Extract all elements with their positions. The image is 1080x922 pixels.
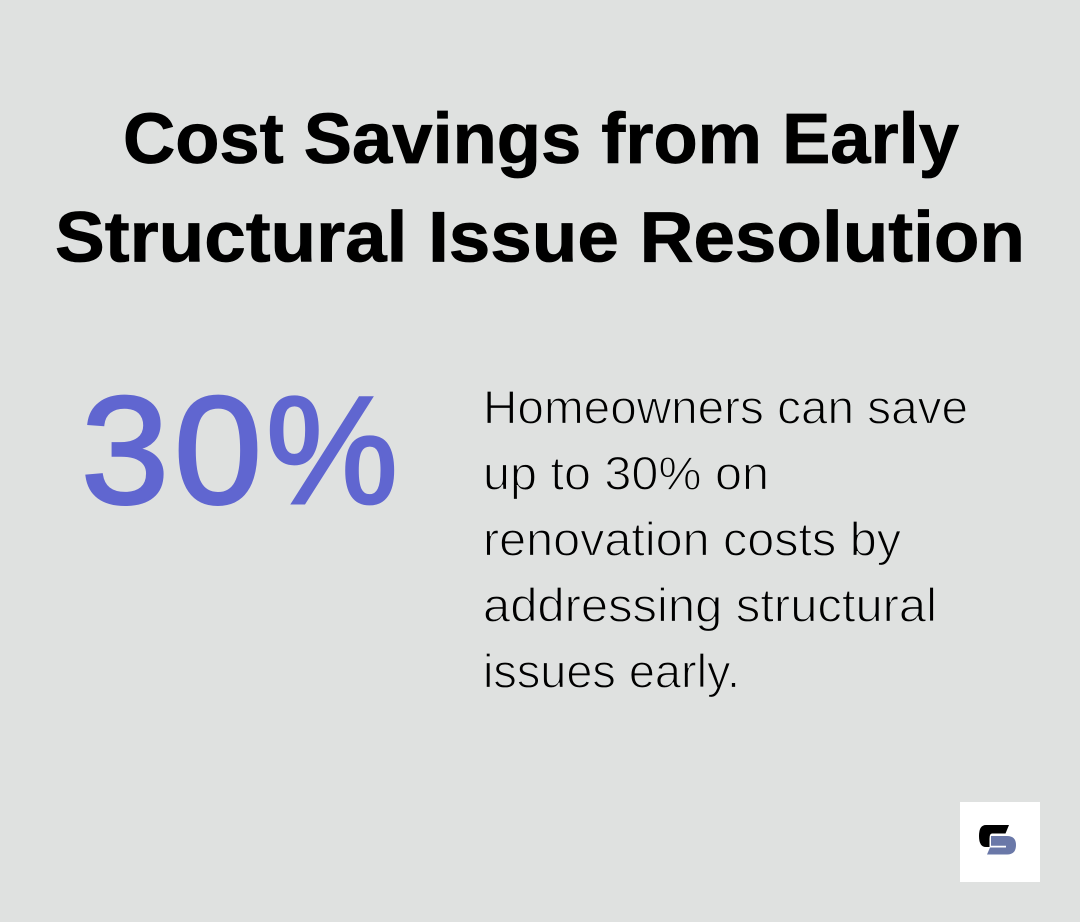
- description text: Homeowners can save: [483, 382, 968, 434]
- description text: addressing structural: [483, 580, 937, 632]
- big statistic: 30%: 0: [174, 365, 262, 536]
- title: Cost Savings from Early: [123, 99, 959, 179]
- big statistic: 30%: [81, 365, 398, 536]
- description text: up to 30% on: [483, 448, 769, 500]
- logo badge: [960, 802, 1040, 882]
- description text: renovation costs by: [483, 514, 901, 566]
- description text: issues early.: [483, 646, 740, 698]
- title: [55, 99, 1025, 278]
- logo mark: S shape: [979, 825, 1016, 854]
- big statistic: 30%: %: [266, 365, 398, 536]
- big statistic: 30%: 3: [81, 365, 169, 536]
- description text: [483, 382, 968, 698]
- title: Structural Issue Resolution: [55, 198, 1025, 278]
